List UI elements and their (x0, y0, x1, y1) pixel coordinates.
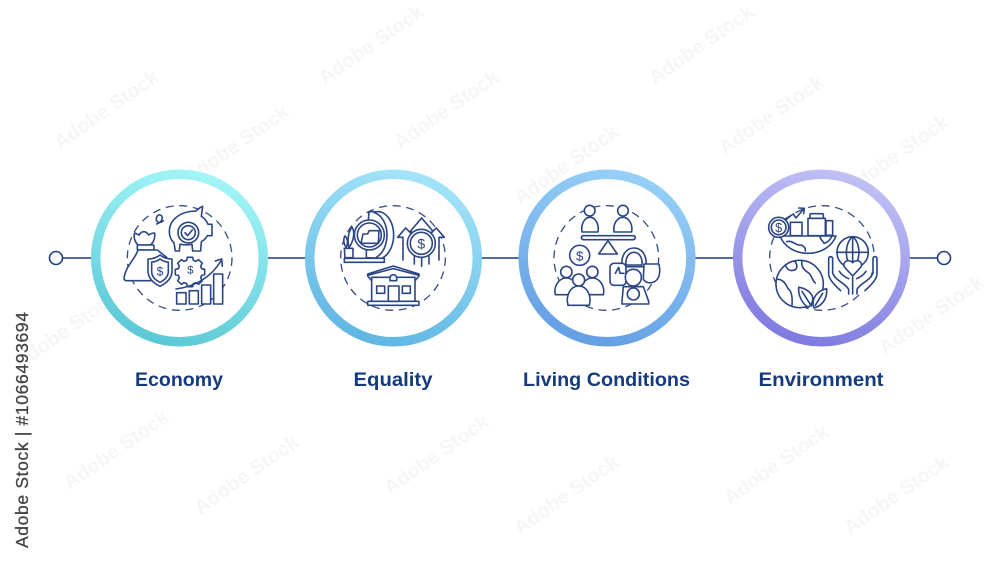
text: Adobe Stock (510, 451, 624, 539)
stock id side text: Adobe Stock | #1066493694 (12, 312, 32, 548)
text: Adobe Stock (10, 286, 124, 374)
label: environment: Environment (758, 369, 884, 391)
icon: living conditions (554, 205, 660, 310)
text: Adobe Stock (720, 421, 834, 509)
label: living conditions: Living Conditions (523, 369, 690, 391)
icon: equality: $ (417, 236, 425, 252)
icon: environment: $ (775, 221, 782, 235)
label: economy: Economy (135, 369, 223, 391)
text: Adobe Stock (380, 411, 494, 499)
text: Adobe Stock (180, 101, 294, 189)
panel: environment (738, 174, 905, 391)
icon: economy: $ (187, 264, 194, 276)
text: Adobe Stock (315, 1, 429, 89)
text: Adobe Stock (60, 406, 174, 494)
icon: living conditions: $ (576, 248, 584, 263)
icon: economy: $ (157, 265, 164, 279)
text: Adobe Stock (840, 111, 954, 199)
start node (50, 252, 62, 264)
text: Adobe Stock (875, 271, 989, 359)
label: equality: Equality (354, 369, 433, 391)
text: Adobe Stock (840, 451, 954, 539)
icon: equality (341, 206, 445, 310)
text: Adobe Stock (715, 71, 829, 159)
ring: environment (738, 174, 905, 342)
text: Adobe Stock (190, 431, 304, 519)
end node (938, 252, 950, 264)
text: Adobe Stock (510, 121, 624, 209)
text: Adobe Stock (390, 66, 504, 154)
ring: economy (96, 174, 263, 342)
panel: living conditions (523, 174, 691, 391)
ring: living conditions (523, 174, 691, 342)
icon: economy (124, 206, 232, 310)
text: Adobe Stock (645, 1, 759, 89)
panel: economy (96, 174, 263, 391)
icon: environment (769, 206, 877, 310)
ring: equality (310, 174, 477, 342)
timeline connector line (62, 257, 938, 259)
text: Adobe Stock (50, 66, 164, 154)
panel: equality (310, 174, 477, 391)
